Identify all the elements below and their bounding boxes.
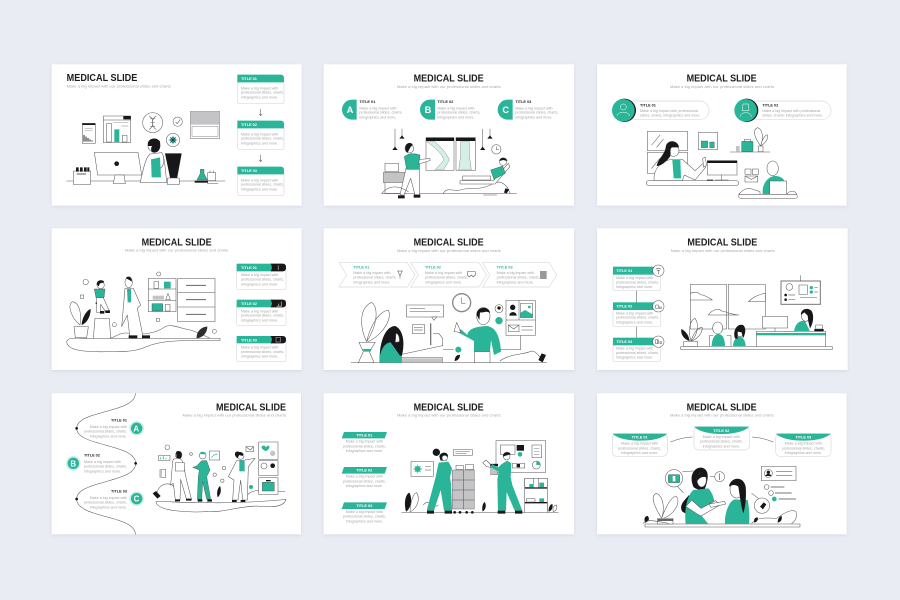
item A: A	[133, 424, 139, 433]
chevron: title 01: Make a big impact with	[353, 271, 391, 275]
heading: MEDICAL SLIDE	[67, 73, 138, 84]
item A: infographics and more.	[90, 434, 127, 438]
item B	[66, 454, 127, 473]
card: title 01	[237, 264, 286, 289]
card: title 01	[612, 434, 667, 456]
item A: professional slides, charts,	[84, 430, 127, 434]
illustration: doctor at desk	[67, 111, 225, 185]
card: title 03: Make a big impact with	[241, 178, 278, 182]
item B: B	[70, 459, 76, 468]
card: title 03: professional slides, charts,	[241, 183, 284, 187]
illustration: doctor on video call	[646, 128, 797, 198]
item: title 01: infographics and more.	[346, 449, 383, 453]
card: title 02	[237, 121, 284, 150]
item C: professional slides, charts,	[84, 501, 127, 505]
card: title 01	[613, 265, 664, 290]
subtitle: Make a big impact with our professional slides and charts	[125, 249, 229, 253]
item B: TITLE 02	[437, 100, 453, 104]
subtitle: Make a big impact with our professional slides and charts	[183, 413, 286, 417]
panel: slide 6 reception	[597, 228, 848, 370]
card: title 03: infographics and more.	[241, 355, 278, 359]
card: title 03: infographics and more.	[241, 187, 278, 191]
subtitle: Make a big impact with our professional slides and charts	[397, 413, 501, 417]
card: title 03: Make a big impact with	[785, 442, 822, 446]
item B	[420, 100, 480, 120]
item C	[498, 100, 558, 120]
item: title 02: Make a big impact with	[346, 475, 383, 479]
card: title 01: professional slides, charts,	[241, 91, 284, 95]
chevron: title 03: Make a big impact with	[497, 271, 534, 275]
card: title 01: TITLE 01	[241, 266, 258, 270]
chevron: title 03: TITLE 03	[497, 266, 513, 270]
card: title 03: infographics and more.	[785, 451, 822, 455]
card: title 03: Make a big impact with	[241, 345, 278, 349]
card: title 03: infographics and more.	[616, 356, 653, 360]
card: title 01: Make a big impact with	[241, 273, 278, 277]
subtitle: Make a big impact with our professional slides and charts	[397, 249, 501, 253]
card: title 02: Make a big impact with	[241, 132, 278, 136]
card: title 01: professional slides, charts,	[241, 278, 284, 282]
heading: MEDICAL SLIDE	[216, 402, 286, 413]
card: title 03: TITLE 03	[241, 338, 257, 342]
item A: A	[347, 105, 354, 115]
heading: MEDICAL SLIDE	[687, 238, 758, 249]
chevron: title 02: TITLE 02	[425, 266, 441, 270]
chevron: title 02: infographics and more.	[425, 280, 462, 284]
panel: slide 8 nurses with cabinet	[324, 393, 574, 534]
illustration: two nurses	[402, 441, 558, 514]
item A: Make a big impact with	[359, 106, 397, 110]
card: title 02: infographics and more.	[241, 318, 278, 322]
card: title 03: professional slides, charts,	[616, 351, 659, 355]
item B: professional slides, charts,	[84, 465, 127, 469]
item A: infographics and more.	[359, 115, 397, 119]
card: title 03	[237, 336, 286, 362]
panel: slide 7 wave timeline	[52, 393, 301, 534]
card: title 01: professional slides, charts,	[616, 280, 659, 284]
card: title 01: Make a big impact with	[241, 86, 278, 90]
card: title 02: TITLE 02	[241, 123, 257, 127]
card: title 01: infographics and more.	[616, 285, 653, 289]
chevron: title 03: professional slides, charts,	[497, 275, 540, 279]
card: title 03	[613, 336, 664, 361]
card: title 01	[237, 75, 284, 104]
item A: TITLE 01	[359, 100, 376, 104]
connector right	[752, 437, 773, 442]
card: title 02: TITLE 02	[616, 305, 632, 309]
heading: MEDICAL SLIDE	[414, 402, 484, 413]
item B: B	[425, 105, 432, 115]
item: title 02	[342, 467, 387, 488]
chevron: title 01: TITLE 01	[353, 266, 370, 270]
illustration: woman and man consulting	[351, 294, 547, 363]
card: title 01: infographics and more.	[241, 95, 278, 99]
item: title 01: professional slides, charts,	[343, 444, 386, 448]
item: title 02: TITLE 02	[356, 469, 372, 473]
item: title 01	[342, 432, 387, 453]
item B: professional slides, charts,	[437, 111, 480, 115]
card: title 02: professional slides, charts,	[700, 440, 743, 444]
illustration: reception desk	[680, 276, 833, 350]
card: title 02: TITLE 02	[713, 429, 729, 433]
card: title 02	[613, 301, 664, 326]
illustration: doctor showing knee x-ray to patient	[382, 129, 517, 198]
item A	[342, 100, 402, 120]
item B: infographics and more.	[84, 469, 121, 473]
arrow down 1	[259, 109, 262, 116]
item B: Make a big impact with	[84, 460, 121, 464]
panel: slide 3 telemedicine	[597, 64, 847, 206]
chevron: title 02: Make a big impact with	[425, 271, 462, 275]
pill: title 02: slides, charts, infographics and more.	[762, 114, 823, 118]
chevron: title 01: professional slides, charts,	[353, 275, 396, 279]
card: title 01: TITLE 01	[241, 77, 258, 81]
item C	[84, 489, 144, 509]
card: title 03: TITLE 03	[241, 169, 257, 173]
pill: title 01: Make a big impact with professional	[640, 109, 698, 113]
item B: TITLE 02	[84, 454, 100, 458]
connector left	[671, 437, 692, 442]
item C: Make a big impact with	[90, 496, 127, 500]
card: title 01: infographics and more.	[621, 451, 658, 455]
panel: slide 4 doctor and child	[52, 228, 302, 370]
card: title 03: professional slides, charts,	[782, 446, 825, 450]
illustration: medical team	[153, 442, 286, 512]
card: title 02: TITLE 02	[241, 302, 257, 306]
pill: title 02: Make a big impact with professional	[762, 109, 820, 113]
item: title 01: Make a big impact with	[346, 440, 383, 444]
subtitle: Make a big impact with our professional slides and charts	[670, 413, 774, 417]
item A: Make a big impact with	[90, 425, 127, 429]
card: title 03	[237, 167, 284, 196]
pill: title 02: TITLE 02	[762, 103, 778, 107]
card: title 03: professional slides, charts,	[241, 350, 284, 354]
card: title 02: infographics and more.	[703, 444, 740, 448]
card: title 01: Make a big impact with	[621, 442, 658, 446]
item A: professional slides, charts,	[359, 111, 402, 115]
chevron: title 02: professional slides, charts,	[425, 275, 468, 279]
item: title 03: professional slides, charts,	[343, 515, 386, 519]
item A	[84, 419, 144, 438]
card: title 02: professional slides, charts,	[241, 137, 284, 141]
connectors	[635, 290, 637, 338]
card: title 01: infographics and more.	[241, 282, 278, 286]
card: title 01: Make a big impact with	[616, 276, 653, 280]
panel: slide 5 consultation chevrons	[324, 228, 574, 370]
subtitle: Make a big impact with our professional slides and charts	[670, 85, 774, 89]
heading: MEDICAL SLIDE	[414, 74, 484, 85]
item C: Make a big impact with	[515, 106, 553, 110]
pill: title 01	[612, 99, 709, 122]
item C: infographics and more.	[515, 115, 553, 119]
card: title 03: TITLE 03	[795, 436, 811, 440]
item B: infographics and more.	[437, 115, 475, 119]
subtitle: Make a big impact with our professional slides and charts	[397, 85, 501, 89]
item C: infographics and more.	[90, 505, 127, 509]
card: title 01: professional slides, charts,	[618, 446, 661, 450]
card: title 02: infographics and more.	[616, 320, 653, 324]
pill: title 02	[734, 99, 831, 122]
item: title 02: professional slides, charts,	[343, 479, 386, 483]
heading: MEDICAL SLIDE	[414, 238, 484, 249]
panel: slide 1 doctor at desk	[52, 64, 302, 206]
pill: title 01: TITLE 01	[640, 103, 657, 107]
subtitle: Make a big impact with our professional slides and charts	[67, 85, 171, 89]
wave timeline	[75, 393, 137, 534]
card: title 01: TITLE 01	[632, 436, 649, 440]
item: title 03: TITLE 03	[356, 504, 372, 508]
card: title 03: Make a big impact with	[616, 347, 653, 351]
item: title 01: TITLE 01	[356, 433, 373, 437]
item B: Make a big impact with	[437, 106, 475, 110]
item: title 03: infographics and more.	[346, 519, 383, 523]
arrow down 2	[259, 155, 262, 162]
item C: C	[134, 495, 140, 504]
panel: slide 9 doctor and patient	[597, 393, 847, 534]
illustration: doctor with patient	[643, 466, 800, 527]
panel: slide 2 knee x-ray	[324, 64, 574, 206]
item C: TITLE 03	[515, 100, 531, 104]
heading: MEDICAL SLIDE	[687, 402, 757, 413]
chevron: title 02	[411, 263, 487, 287]
item C: C	[502, 105, 509, 115]
card: title 02: professional slides, charts,	[616, 316, 659, 320]
card: title 02	[694, 427, 749, 450]
item: title 03	[342, 502, 387, 523]
heading: MEDICAL SLIDE	[687, 74, 757, 85]
subtitle: Make a big impact with our professional slides and charts	[671, 249, 775, 253]
item: title 02: infographics and more.	[346, 484, 383, 488]
card: title 03: TITLE 03	[616, 340, 632, 344]
chevron: title 03	[482, 263, 557, 287]
card: title 01: TITLE 01	[616, 269, 633, 273]
card: title 02	[237, 300, 286, 326]
card: title 02: Make a big impact with	[703, 435, 740, 439]
card: title 02: Make a big impact with	[616, 311, 653, 315]
chevron: title 01: infographics and more.	[353, 280, 391, 284]
item: title 03: Make a big impact with	[346, 510, 383, 514]
card: title 02: professional slides, charts,	[241, 314, 284, 318]
item A: TITLE 01	[111, 419, 128, 423]
item C: professional slides, charts,	[515, 111, 558, 115]
item C: TITLE 03	[111, 489, 127, 493]
chevron: title 03: infographics and more.	[497, 280, 534, 284]
pill: title 01: slides, charts, infographics and more.	[640, 114, 701, 118]
heading: MEDICAL SLIDE	[142, 237, 212, 248]
chevron: title 01	[339, 263, 415, 287]
card: title 02: infographics and more.	[241, 141, 278, 145]
illustration: doctor with child patient and cabinet	[67, 272, 220, 352]
card: title 02: Make a big impact with	[241, 309, 278, 313]
card: title 03	[776, 434, 831, 456]
